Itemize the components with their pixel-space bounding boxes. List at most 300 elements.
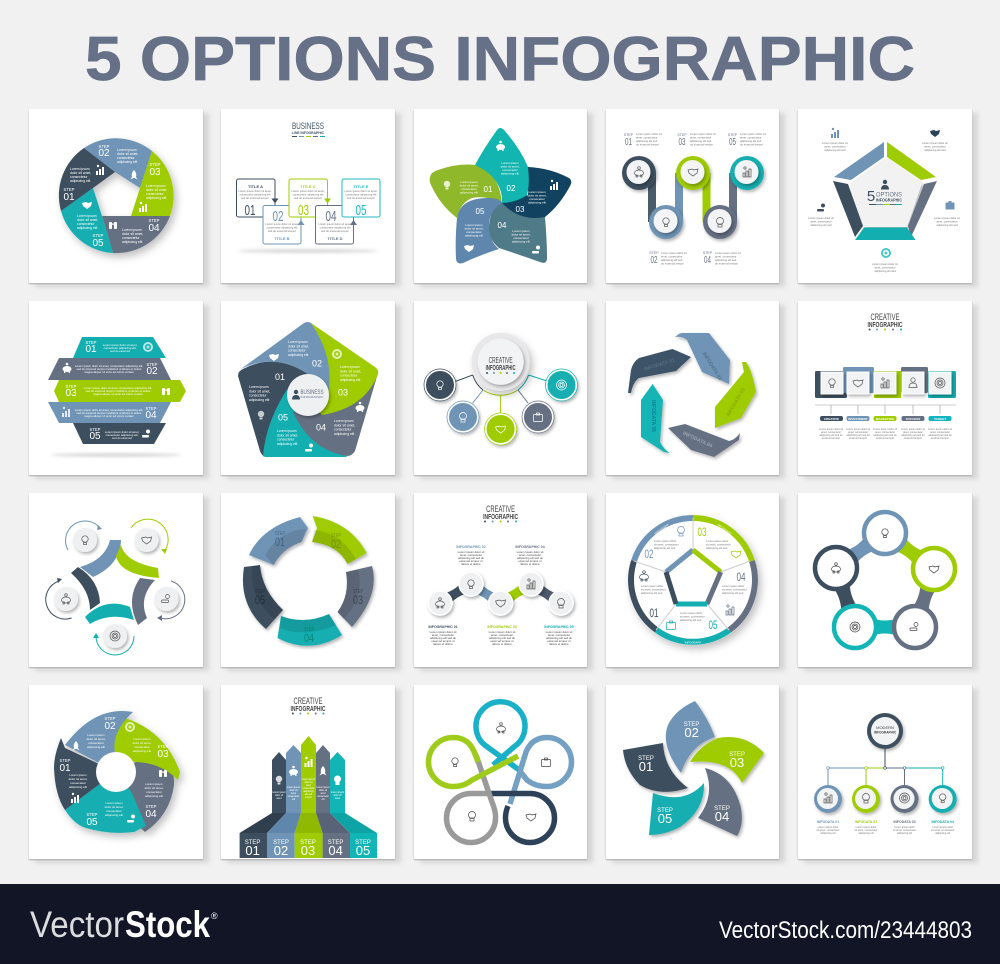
panel: pinwheel blades (606, 685, 785, 863)
logo: Vector (30, 904, 124, 945)
cycle arrows (46, 519, 185, 655)
box paragraphs: sed do eiusmod tempor (268, 229, 296, 233)
step labels: 03 (353, 593, 363, 607)
column text: amet, consectetur (460, 553, 482, 557)
segment text: consectetur (88, 741, 104, 745)
connectors (652, 173, 733, 222)
heading: BUSINESS (292, 121, 324, 131)
segment text: consectetur (288, 349, 306, 353)
sector text: Lorem ipsum dolor (706, 539, 728, 543)
blade labels: 01 (639, 759, 653, 774)
sector text (641, 539, 747, 622)
pills: MARKETING (876, 417, 895, 421)
petal 03 navy (500, 167, 571, 219)
petal numbers: 01 (484, 185, 493, 194)
segment 03 green (310, 323, 378, 415)
numbers: 01 (275, 372, 285, 382)
step labels: 02 (104, 721, 116, 732)
panel: snake timeline (606, 109, 785, 287)
column text: Lorem ipsum dolor sit (901, 428, 925, 431)
step labels: 01 (63, 192, 75, 203)
child titles: INFODATA 02 (855, 820, 877, 824)
band labels: STEP (90, 427, 101, 432)
segment 02 blue (241, 322, 330, 394)
center heading: INFOGRAPHIC (300, 395, 324, 399)
node icons (436, 579, 564, 608)
box paragraphs: consectetur adipiscing elit (240, 192, 271, 196)
loop icons (452, 723, 550, 821)
arrow text: elit sed (305, 793, 313, 796)
blades (623, 701, 764, 836)
sector numbers: 01 (650, 606, 659, 620)
band text: sed do eiusmod (112, 436, 132, 440)
segment text: adipiscing elit (146, 196, 166, 200)
step labels: 02 (331, 537, 341, 551)
arrow text: Lorem ipsum (331, 791, 344, 794)
petal text: consectetur (513, 236, 529, 240)
numbers: 04 (316, 422, 326, 432)
band labels (65, 340, 158, 442)
heading: LINE INFOGRAPHIC (292, 130, 324, 135)
ribbon labels (644, 351, 747, 450)
column text: Lorem ipsum dolor sit (458, 550, 485, 554)
step labels: STEP (677, 133, 687, 137)
outer text: amet, consectetur (924, 144, 946, 148)
petal 01 green (430, 165, 502, 218)
petal text: dolor sit amet, (528, 194, 547, 198)
ring inner shading (252, 529, 360, 632)
column text: eiusmod tempor (931, 437, 949, 440)
ribbon labels: INFODATA 01 (644, 357, 676, 373)
ribbon labels: INFODATA 02 (701, 351, 723, 382)
column text: eiusmod tempor ut (459, 559, 483, 563)
step text (636, 132, 766, 266)
ring icons (832, 529, 939, 632)
segment text: adipiscing elit (145, 794, 163, 798)
pills (820, 416, 952, 421)
column text: Lorem ipsum dolor sit (928, 428, 952, 431)
step labels: STEP (149, 218, 160, 223)
segment text: consectetur (146, 790, 162, 794)
step labels: STEP (649, 251, 659, 255)
petal text: dolor sit amet, (501, 164, 520, 168)
segment text: consectetur (340, 374, 358, 378)
segment text: dolor sit amet, (277, 433, 298, 437)
box paragraphs: sed do eiusmod tempor (321, 229, 349, 233)
panel: curled donut (29, 685, 209, 863)
petal numbers: 04 (498, 221, 507, 230)
hub heading: INFOGRAPHIC (486, 365, 516, 372)
discs (54, 528, 178, 648)
box numbers: 03 (298, 202, 309, 219)
step labels: STEP (275, 531, 285, 537)
step labels: STEP (158, 744, 169, 749)
panel: square timeline (798, 301, 978, 479)
column text: labore et dolore (433, 642, 453, 646)
panel: arrows and floor (221, 685, 401, 863)
step labels: 04 (328, 843, 343, 858)
rings (815, 512, 955, 648)
bands (48, 337, 186, 444)
sector numbers: 04 (736, 570, 746, 584)
box numbers: 05 (356, 202, 366, 219)
column text: labore et dolore (492, 642, 512, 646)
segment text: consectetur (70, 175, 88, 179)
ring arcs (71, 540, 159, 625)
white squares (821, 372, 951, 394)
segment text: dolor sit amet, (340, 369, 361, 373)
option circles (425, 370, 576, 444)
column text: amet, consectetur (548, 633, 570, 637)
outer text: amet, consectetur (810, 220, 832, 224)
step text: Lorem ipsum dolor sit (690, 132, 716, 136)
arrow icons (276, 757, 341, 785)
child text: Lorem ipsum dolor (818, 826, 839, 829)
column text: labore et dolore (520, 562, 540, 566)
step labels: STEP (355, 840, 371, 846)
step labels: 05 (356, 843, 370, 858)
segment text: Lorem ipsum (145, 782, 163, 786)
node discs (428, 572, 573, 615)
arrow text (272, 778, 344, 801)
sector numbers: 03 (698, 525, 707, 539)
column text: amet, consectetur (875, 431, 895, 434)
node icons (634, 167, 751, 227)
step labels: STEP (99, 144, 110, 149)
arrow text: dolor sit (333, 794, 342, 797)
heading: CREATIVE (294, 696, 322, 706)
step labels: STEP (300, 840, 316, 846)
step text: do eiusmod tempor (661, 262, 684, 266)
petal numbers: 03 (516, 205, 525, 214)
box text: TITLE B (274, 236, 290, 241)
petal text: consectetur (502, 168, 518, 172)
child text: sit amet, consectetur (893, 829, 916, 832)
segment text: dolor sit amet, (70, 171, 91, 175)
step labels: 04 (148, 223, 160, 234)
column text: eiusmod tempor (876, 437, 894, 440)
segment text: Lorem ipsum (69, 773, 87, 777)
arrow text: consectetur (303, 787, 315, 790)
panel: org tree (798, 685, 978, 863)
band text: Lorem ipsum dolor sit amet, (103, 343, 137, 347)
petal text: adipiscing elit (465, 234, 483, 238)
center disc (287, 374, 329, 416)
step labels: STEP (60, 758, 71, 763)
sector text: Lorem ipsum dolor (722, 584, 744, 588)
child titles: INFODATA 04 (932, 820, 954, 824)
blade labels (638, 722, 745, 826)
sector text: adipiscing elit sed (641, 591, 663, 595)
child titles: INFODATA 03 (893, 820, 916, 824)
step labels: 05 (86, 817, 98, 828)
box text: TITLE E (354, 184, 369, 189)
petal text: consectetur (529, 197, 545, 201)
column text: amet, consectetur (432, 633, 454, 637)
petal 05 blue (456, 198, 502, 263)
column text: labore et dolore (549, 642, 569, 646)
column titles: INFOGRAPHIC 05 (544, 625, 574, 629)
segment text: Lorem ipsum (340, 365, 360, 369)
child text: Lorem ipsum dolor (856, 826, 877, 829)
band text: Lorem ipsum dolor sit amet, (105, 430, 139, 434)
top node (867, 713, 903, 749)
step text: do eiusmod tempor (740, 142, 763, 146)
footer bar (0, 884, 1000, 964)
coloured blocks (815, 367, 956, 398)
step labels (255, 531, 363, 645)
axis line (815, 405, 956, 414)
step text: do eiusmod tempor (715, 262, 738, 266)
column text: eiusmod tempor (849, 437, 867, 440)
disc icons (62, 536, 170, 641)
step text: amet, consectetur (690, 136, 711, 140)
petal 02 teal (475, 128, 529, 203)
child text: Lorem ipsum dolor (894, 826, 915, 829)
arrow text: tempor (305, 796, 312, 799)
box paragraphs: consectetur adipiscing elit (346, 192, 377, 196)
segment icons (82, 165, 147, 229)
box paragraphs: Lorem ipsum dolor sit amet, (344, 189, 378, 193)
column text: adipiscing elit sed do (846, 434, 870, 437)
step labels (624, 133, 738, 266)
box numbers: 01 (244, 202, 256, 219)
band text: sed do eiusmod tempor incididunt ut labore et dolore (76, 411, 142, 415)
segment 05 teal (263, 385, 347, 457)
petal numbers: 05 (476, 207, 485, 216)
column text: amet, consectetur (491, 633, 513, 637)
loops (428, 702, 572, 842)
segment text: dolor sit amet, (105, 805, 124, 809)
segment text: adipiscing elit (340, 378, 360, 382)
panel: petal star (414, 109, 593, 287)
child text: sit amet, consectetur (931, 829, 954, 832)
petal 04 grey-teal (489, 203, 547, 263)
segment text: dolor sit amet, (288, 344, 309, 348)
panel: pentagon frame (798, 109, 978, 287)
box paragraphs: consectetur adipiscing elit (267, 226, 298, 230)
numbers: 03 (338, 388, 348, 398)
sector text: sit amet, consectetur (654, 542, 679, 546)
floor (240, 813, 377, 858)
column titles: INFOGRAPHIC 04 (515, 545, 545, 549)
segment text: adipiscing elit (105, 813, 123, 817)
panel: circle with pentagon hole (29, 109, 209, 287)
child text (816, 826, 954, 835)
column text: adipiscing elit sed do (546, 636, 572, 640)
segment text (69, 733, 164, 817)
arrow text: dolor sit (304, 781, 313, 784)
outer text: Lorem ipsum dolor sit (934, 216, 960, 220)
panel: hexagon bands (29, 301, 209, 479)
arrow text: Lorem ipsum (302, 778, 315, 781)
ring labels (653, 523, 733, 644)
heading: INFOGRAPHIC (483, 512, 518, 521)
outer text: amet, consectetur (936, 220, 958, 224)
band labels: STEP (146, 406, 157, 411)
column text: Lorem ipsum dolor sit (430, 630, 457, 634)
box text (248, 184, 369, 241)
step labels: 02 (650, 255, 658, 266)
band text: consectetur adipiscing elit, (106, 433, 139, 437)
segment text: consectetur (117, 156, 135, 160)
segment text: adipiscing elit (249, 398, 269, 402)
step labels: STEP (87, 812, 98, 817)
segment text: consectetur (334, 428, 352, 432)
column text (430, 550, 573, 646)
column text: adipiscing elit sed do (819, 434, 843, 437)
segment text: dolor sit amet, (77, 218, 98, 222)
sector icons (640, 526, 741, 630)
band text: magna aliqua. Ut enim ad minim veniam (84, 370, 135, 374)
sector text: Lorem ipsum dolor (680, 611, 702, 615)
connector lines (454, 375, 547, 415)
column text (819, 428, 952, 440)
child icons (824, 793, 946, 803)
sector text: adipiscing elit sed (680, 618, 702, 622)
box text: TITLE D (327, 236, 343, 241)
petal text: Lorem ipsum (501, 161, 519, 165)
arrow text: elit (322, 798, 325, 801)
outer text: adipiscing elit sed (810, 223, 832, 227)
center heading (292, 390, 324, 400)
sector text: sit amet, consectetur (722, 588, 747, 592)
band text: consectetur adipiscing elit, (104, 346, 137, 350)
box paragraphs: sed do eiusmod tempor (294, 196, 322, 200)
segment text: adipiscing elit (133, 749, 151, 753)
arrow text: amet (335, 797, 340, 800)
step labels: STEP (255, 589, 265, 595)
step labels: STEP (353, 589, 363, 595)
column text: Lorem ipsum dolor sit (489, 630, 516, 634)
step labels: STEP (64, 187, 75, 192)
petal text: dolor sit amet, (465, 226, 484, 230)
segment text: dolor sit amet, (145, 786, 164, 790)
column text: adipiscing elit sed do (901, 434, 925, 437)
step labels: 05 (255, 593, 265, 607)
step labels: STEP (703, 251, 713, 255)
center heading: INFOGRAPHIC (876, 198, 903, 202)
connector lines (828, 749, 943, 785)
ring labels: INFOGRAPH (717, 523, 733, 536)
step labels (63, 144, 161, 249)
child text: adipiscing elit (820, 832, 836, 835)
ribbon labels: INFODATA 03 (726, 387, 747, 418)
blade labels: 03 (730, 755, 744, 770)
band labels: 02 (146, 366, 158, 377)
segment text: dolor sit amet, (87, 737, 106, 741)
outer text: amet, consectetur (874, 266, 896, 270)
petal text: adipiscing elit (512, 240, 530, 244)
segment text: consectetur (134, 745, 150, 749)
ground shadow (238, 250, 378, 252)
column text: eiusmod tempor ut (431, 639, 455, 643)
inner pentagon (850, 158, 922, 227)
step labels: STEP (304, 627, 314, 633)
step text: Lorem ipsum dolor sit (715, 251, 741, 255)
outer text: Lorem ipsum dolor sit (822, 141, 848, 145)
column text: amet, consectetur (519, 553, 541, 557)
step labels: 03 (301, 843, 315, 858)
outer text (808, 141, 960, 273)
heading: INFOGRAPHIC (868, 320, 903, 329)
sector text: Lorem ipsum dolor (654, 539, 676, 543)
outer text: adipiscing elit sed (924, 148, 946, 152)
outer text: amet, consectetur (824, 144, 846, 148)
column titles (428, 545, 574, 629)
blade labels: STEP (684, 722, 699, 728)
center heading (867, 180, 903, 205)
segment text: Lorem ipsum (87, 733, 105, 737)
column text: amet, consectetur (848, 431, 868, 434)
band labels: STEP (66, 384, 77, 389)
bowtie connectors (435, 576, 566, 611)
bridges (819, 518, 951, 645)
column text: adipiscing elit sed do (489, 636, 515, 640)
petal numbers: 02 (507, 184, 516, 193)
panel: ribbon arrows (606, 301, 785, 479)
column text: eiusmod tempor (822, 437, 840, 440)
sector text: adipiscing elit sed (722, 591, 744, 595)
segment text: consectetur (122, 236, 140, 240)
petal text: consectetur (466, 230, 482, 234)
logo: Stock (125, 904, 210, 945)
blade labels: STEP (657, 808, 673, 814)
step labels: STEP (728, 133, 738, 137)
segment text: Lorem ipsum (70, 167, 90, 171)
segment text: Lorem ipsum (249, 385, 269, 389)
logo: ® (211, 911, 218, 921)
sector text: sit amet, consectetur (680, 614, 705, 618)
column text: labore et dolore (461, 562, 481, 566)
column text: Lorem ipsum dolor sit (546, 630, 573, 634)
box paragraphs: sed do eiusmod tempor (241, 196, 269, 200)
column text: amet, consectetur (903, 431, 923, 434)
upright arrows (272, 736, 345, 813)
petal text: Lorem ipsum (460, 180, 478, 184)
band text: sed do eiusmod tempor incididunt ut labore et dolore (76, 367, 142, 371)
circle segments (59, 138, 174, 253)
box paragraphs: Lorem ipsum dolor sit amet, (291, 189, 325, 193)
box text: TITLE C (300, 184, 316, 189)
band text: Lorem ipsum dolor sit amet, consectetur adipiscing elit, (75, 408, 143, 412)
arrow text: elit (292, 798, 295, 801)
step labels: STEP (150, 162, 161, 167)
child text: adipiscing elit (858, 832, 874, 835)
sector text: adipiscing elit sed (654, 546, 676, 550)
hub disc (472, 333, 530, 391)
ring labels: INFOGRAPH (685, 640, 701, 644)
column text: adipiscing elit sed do (928, 434, 952, 437)
heading (292, 121, 325, 137)
square icons (829, 378, 945, 388)
column text: adipiscing elit sed do (430, 636, 456, 640)
arrow text: amet (320, 792, 326, 795)
box numbers: 04 (326, 208, 336, 225)
child text: sit amet, consectetur (816, 829, 840, 832)
segment text: adipiscing elit (122, 240, 142, 244)
box paragraphs: Lorem ipsum dolor sit amet, (238, 189, 272, 193)
outer ring arcs (631, 518, 755, 642)
box numbers: 02 (272, 208, 284, 225)
petal text: Lorem ipsum (465, 223, 483, 227)
blade labels: 04 (715, 809, 729, 824)
segment text: dolor sit amet, (249, 389, 270, 393)
box paragraphs: Lorem ipsum dolor sit amet, (318, 222, 352, 226)
panel: ringed pentagon (606, 493, 785, 671)
band text (75, 343, 152, 440)
step labels: 01 (625, 137, 632, 148)
